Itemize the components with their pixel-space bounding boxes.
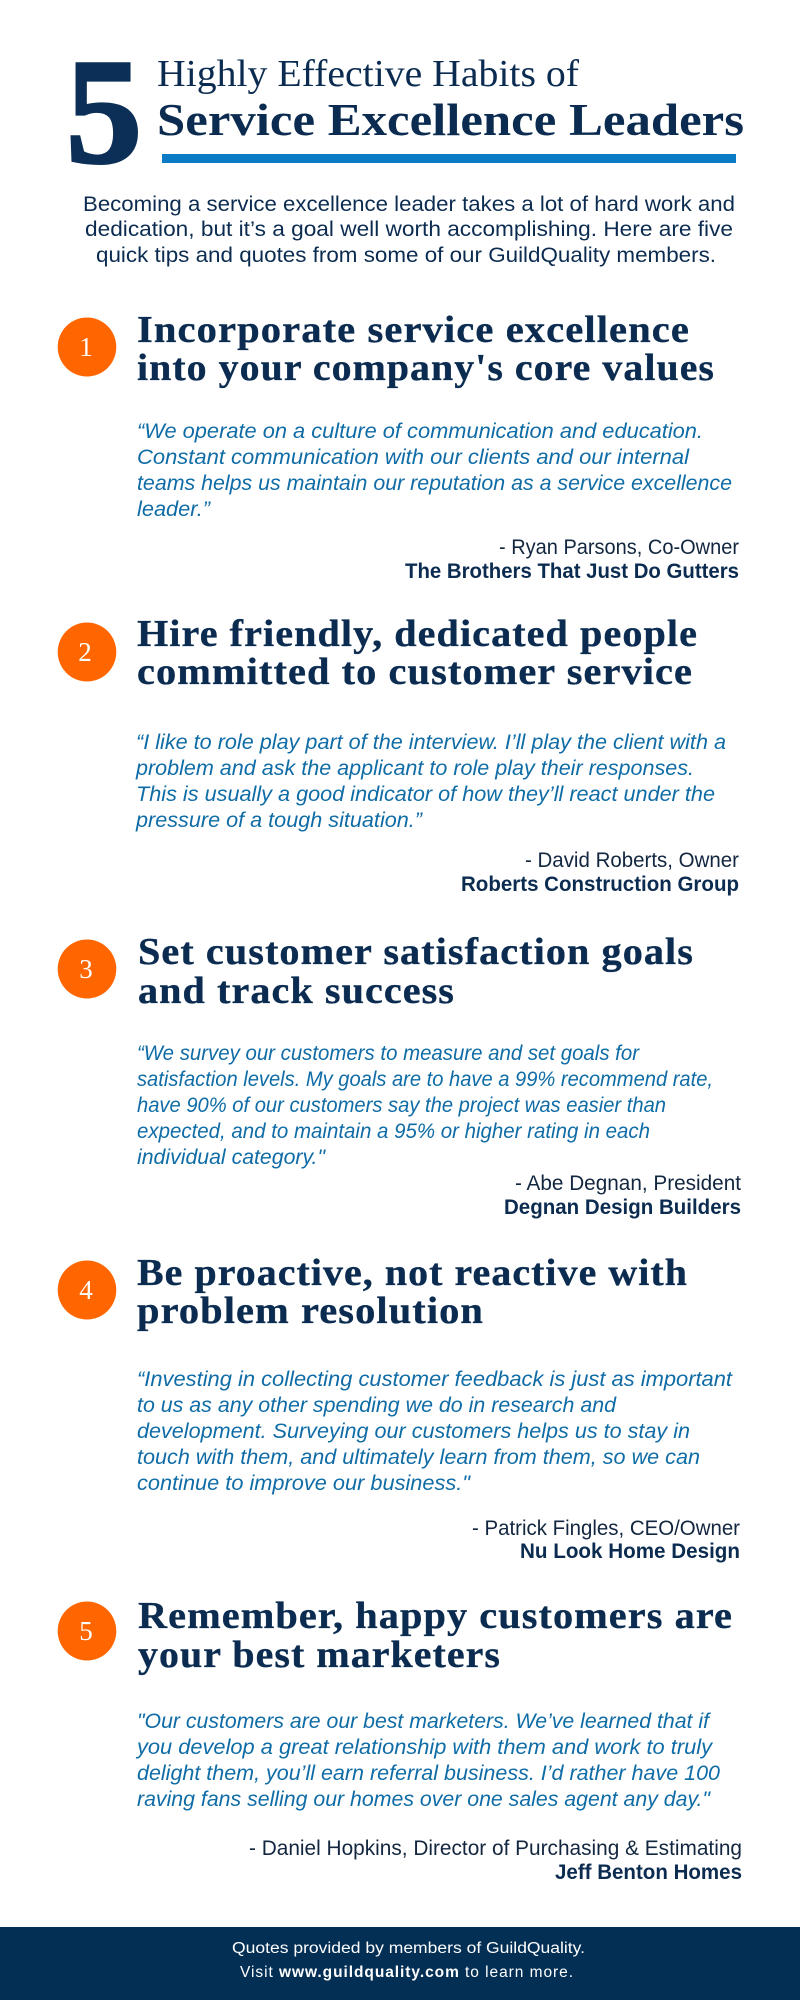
quote 3: have 90% of our customers say the project was easier than — [137, 1093, 666, 1117]
quote 3 — [137, 1041, 713, 1169]
quote 2: pressure of a tough situation.” — [135, 808, 423, 832]
heading 3: and track success — [138, 970, 455, 1012]
panel: habit 4 — [58, 1252, 740, 1563]
attribution 1: The Brothers That Just Do Gutters — [405, 559, 739, 583]
intro paragraph — [83, 192, 735, 267]
heading 1: Incorporate service excellence — [137, 309, 690, 351]
quote 1: Constant communication with our clients and our internal — [137, 445, 690, 469]
panel: habit 2 — [58, 613, 739, 896]
intro paragraph: dedication, but it’s a goal well worth accomplishing. Here are five — [85, 217, 733, 241]
attribution 4 — [472, 1516, 740, 1563]
heading 4: Be proactive, not reactive with — [137, 1252, 688, 1294]
footer band — [0, 1927, 800, 2000]
quote 3: individual category." — [137, 1145, 326, 1169]
number badge 3: 3 — [79, 954, 93, 984]
panel: habit 3 — [58, 931, 741, 1219]
title line 1: Highly Effective Habits of — [157, 53, 579, 95]
quote 1: leader.” — [137, 497, 211, 521]
attribution 3: Degnan Design Builders — [504, 1195, 741, 1219]
quote 1: teams helps us maintain our reputation as a service excellence — [137, 471, 732, 495]
attribution 3 — [504, 1171, 741, 1219]
attribution 5: Jeff Benton Homes — [555, 1860, 742, 1884]
number badge 2 — [58, 622, 116, 682]
quote 4: touch with them, and ultimately learn from them, so we can — [137, 1445, 700, 1469]
quote 3: expected, and to maintain a 95% or higher rating in each — [137, 1119, 650, 1143]
heading 3 — [138, 931, 694, 1012]
attribution 5: - Daniel Hopkins, Director of Purchasing & Estimating — [249, 1836, 742, 1860]
quote 2 — [135, 730, 726, 832]
big numeral 5: 5 — [66, 29, 142, 195]
attribution 1 — [405, 535, 739, 583]
quote 4 — [137, 1367, 733, 1495]
attribution 3: - Abe Degnan, President — [515, 1171, 741, 1195]
quote 4: development. Surveying our customers helps us to stay in — [137, 1419, 690, 1443]
heading 2: Hire friendly, dedicated people — [137, 613, 698, 655]
heading 1 — [137, 309, 715, 389]
quote 3: satisfaction levels. My goals are to have a 99% recommend rate, — [137, 1067, 713, 1091]
attribution 1: - Ryan Parsons, Co-Owner — [499, 535, 739, 559]
title line 2: Service Excellence Leaders — [157, 94, 744, 145]
intro paragraph: Becoming a service excellence leader takes a lot of hard work and — [83, 192, 735, 216]
title underline bar — [162, 154, 736, 163]
title block — [66, 29, 744, 195]
attribution 4: Nu Look Home Design — [520, 1539, 740, 1563]
heading 5: Remember, happy customers are — [138, 1595, 733, 1637]
quote 5: "Our customers are our best marketers. We’ve learned that if — [137, 1709, 711, 1733]
heading 5 — [138, 1595, 733, 1676]
heading 4 — [137, 1252, 688, 1332]
quote 4: “Investing in collecting customer feedback is just as important — [137, 1367, 733, 1391]
number badge 1 — [58, 318, 116, 376]
quote 4: continue to improve our business." — [137, 1471, 471, 1495]
intro paragraph: quick tips and quotes from some of our GuildQuality members. — [96, 243, 716, 267]
number badge 4: 4 — [79, 1275, 93, 1305]
quote 1 — [137, 419, 732, 521]
number badge 4 — [58, 1260, 116, 1320]
heading 5: your best marketers — [138, 1634, 501, 1676]
quote 5: you develop a great relationship with them and work to truly — [135, 1735, 713, 1759]
quote 4: to us as any other spending we do in research and — [137, 1393, 617, 1417]
quote 2: This is usually a good indicator of how they’ll react under the — [136, 782, 715, 806]
quote 2: “I like to role play part of the interview. I’ll play the client with a — [136, 730, 726, 754]
number badge 2: 2 — [78, 637, 92, 667]
quote 5: raving fans selling our homes over one sales agent any day." — [137, 1787, 711, 1811]
quote 1: “We operate on a culture of communication and education. — [137, 419, 703, 443]
heading 2 — [137, 613, 698, 693]
quote 3: “We survey our customers to measure and set goals for — [137, 1041, 640, 1065]
quote 5 — [135, 1709, 720, 1811]
attribution 2: - David Roberts, Owner — [525, 848, 739, 872]
attribution 2: Roberts Construction Group — [461, 872, 739, 896]
panel: habit 1 — [58, 309, 739, 583]
heading 3: Set customer satisfaction goals — [138, 931, 694, 973]
attribution 5 — [249, 1836, 742, 1884]
footer text: Quotes provided by members of GuildQuality. — [232, 1940, 585, 1957]
number badge 5: 5 — [79, 1616, 93, 1646]
panel: habit 5 — [58, 1595, 742, 1884]
number badge 1: 1 — [79, 332, 93, 362]
heading 2: committed to customer service — [137, 651, 693, 693]
attribution 2 — [461, 848, 739, 896]
quote 5: delight them, you’ll earn referral business. I’d rather have 100 — [137, 1761, 720, 1785]
footer text — [232, 1940, 585, 1981]
heading 1: into your company's core values — [137, 347, 715, 389]
attribution 4: - Patrick Fingles, CEO/Owner — [472, 1516, 740, 1540]
footer text: Visit www.guildquality.com to learn more. — [240, 1964, 573, 1981]
number badge 3 — [58, 940, 116, 998]
heading 4: problem resolution — [137, 1290, 484, 1332]
number badge 5 — [58, 1602, 116, 1660]
quote 2: problem and ask the applicant to role play their responses. — [135, 756, 694, 780]
